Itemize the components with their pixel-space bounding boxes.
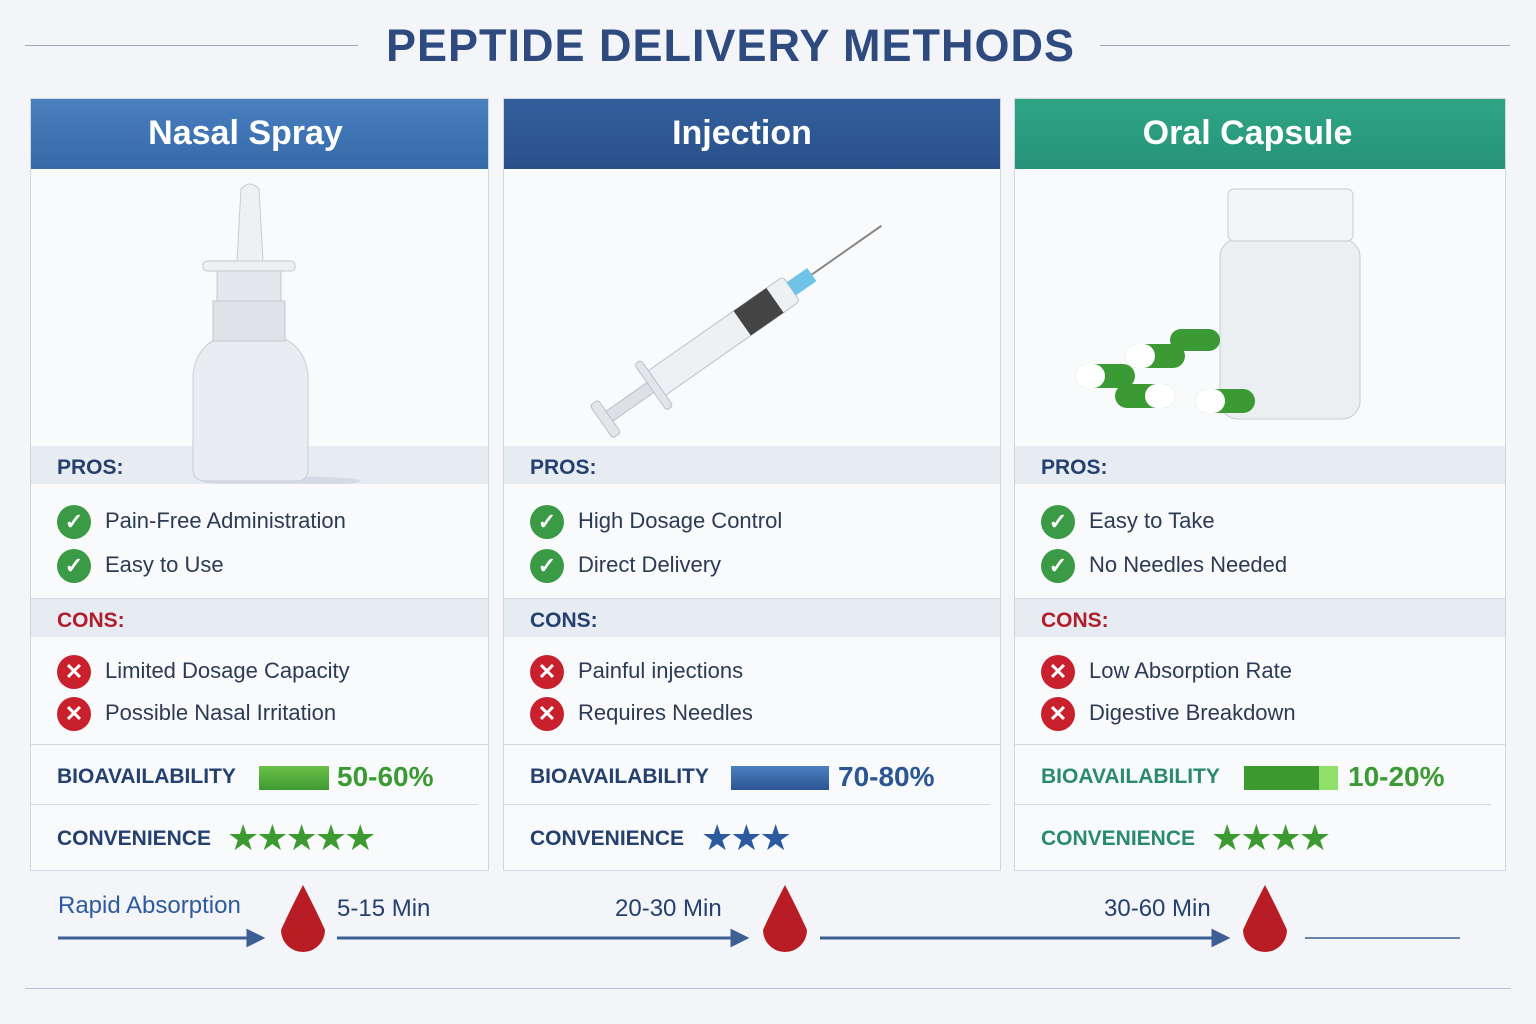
heading: injection: Injection [672,114,812,152]
pros: PROS: [57,456,124,479]
cons: CONS: [530,609,598,632]
icon: nasal spray bottle [192,184,361,484]
cons [504,599,1000,637]
panel: nasal spray [30,98,489,871]
pros: PROS: [530,456,597,479]
heading: oral capsule [1015,99,1505,169]
cons: CONS: [1041,609,1109,632]
panel: oral capsule: Low Absorption Rate [1089,658,1292,683]
panel: oral capsule: Easy to Take [1089,508,1215,533]
title: PEPTIDE DELIVERY METHODS [386,20,1075,71]
panel: injection: ✕ [538,659,556,684]
panel: oral capsule [1014,98,1506,871]
panel: nasal spray: ✓ [65,553,83,578]
panel: nasal spray: ✕ [65,701,83,726]
panel: oral capsule: ★★★★ [1211,817,1328,858]
pros [1015,446,1505,484]
times: 5-15 Min [337,895,430,922]
bioavailability: BIOAVAILABILITY [530,765,709,788]
panel: nasal spray: Possible Nasal Irritation [105,700,336,725]
timeline: 20-30 Min [615,895,722,922]
panel: injection: Direct Delivery [578,552,721,577]
panel: injection: ✓ [538,509,556,534]
panel: oral capsule: No Needles Needed [1089,552,1287,577]
heading: oral capsule: Oral Capsule [1143,114,1352,152]
heading: injection [504,99,1000,169]
cons [1015,599,1505,637]
panel: oral capsule: ✕ [1049,659,1067,684]
timeline [58,885,1460,952]
panel: nasal spray: Limited Dosage Capacity [105,658,350,683]
icon: pill bottle with capsules [1075,188,1360,420]
bioavailability: BIOAVAILABILITY [1041,765,1220,788]
panel: injection [503,98,1001,871]
panel: nasal spray: ✓ [65,509,83,534]
panel: injection: ✕ [538,701,556,726]
panel: nasal spray: Easy to Use [105,552,224,577]
panel: nasal spray: ★★★★★ [227,817,373,858]
panel: injection: 70-80% [838,761,935,792]
panel: nasal spray: 50-60% [337,761,434,792]
heading: nasal spray: Nasal Spray [148,114,343,152]
panel: oral capsule: ✓ [1049,553,1067,578]
convenience: CONVENIENCE [57,827,211,850]
pros [31,446,488,484]
arrows and drops [58,885,1460,952]
panel: oral capsule: ✓ [1049,509,1067,534]
panel: injection: ★★★ [701,817,789,858]
cons: CONS: [57,609,125,632]
panel: injection: Painful injections [578,658,743,683]
panel: nasal spray: ✕ [65,659,83,684]
panel: injection: High Dosage Control [578,508,782,533]
cons [31,599,488,637]
label: rapid absorption: Rapid Absorption [58,892,241,919]
icon: syringe [590,225,882,438]
heading: nasal spray [31,99,488,169]
bioavailability: BIOAVAILABILITY [57,765,236,788]
panel: injection: Requires Needles [578,700,753,725]
pros: PROS: [1041,456,1108,479]
convenience: CONVENIENCE [530,827,684,850]
panel: injection: ✓ [538,553,556,578]
panel: oral capsule: ✕ [1049,701,1067,726]
pros [504,446,1000,484]
panel: oral capsule: 10-20% [1348,761,1445,792]
timeline: 30-60 Min [1104,895,1211,922]
panel: nasal spray: Pain-Free Administration [105,508,346,533]
panel: oral capsule: Digestive Breakdown [1089,700,1296,725]
convenience: CONVENIENCE [1041,827,1195,850]
